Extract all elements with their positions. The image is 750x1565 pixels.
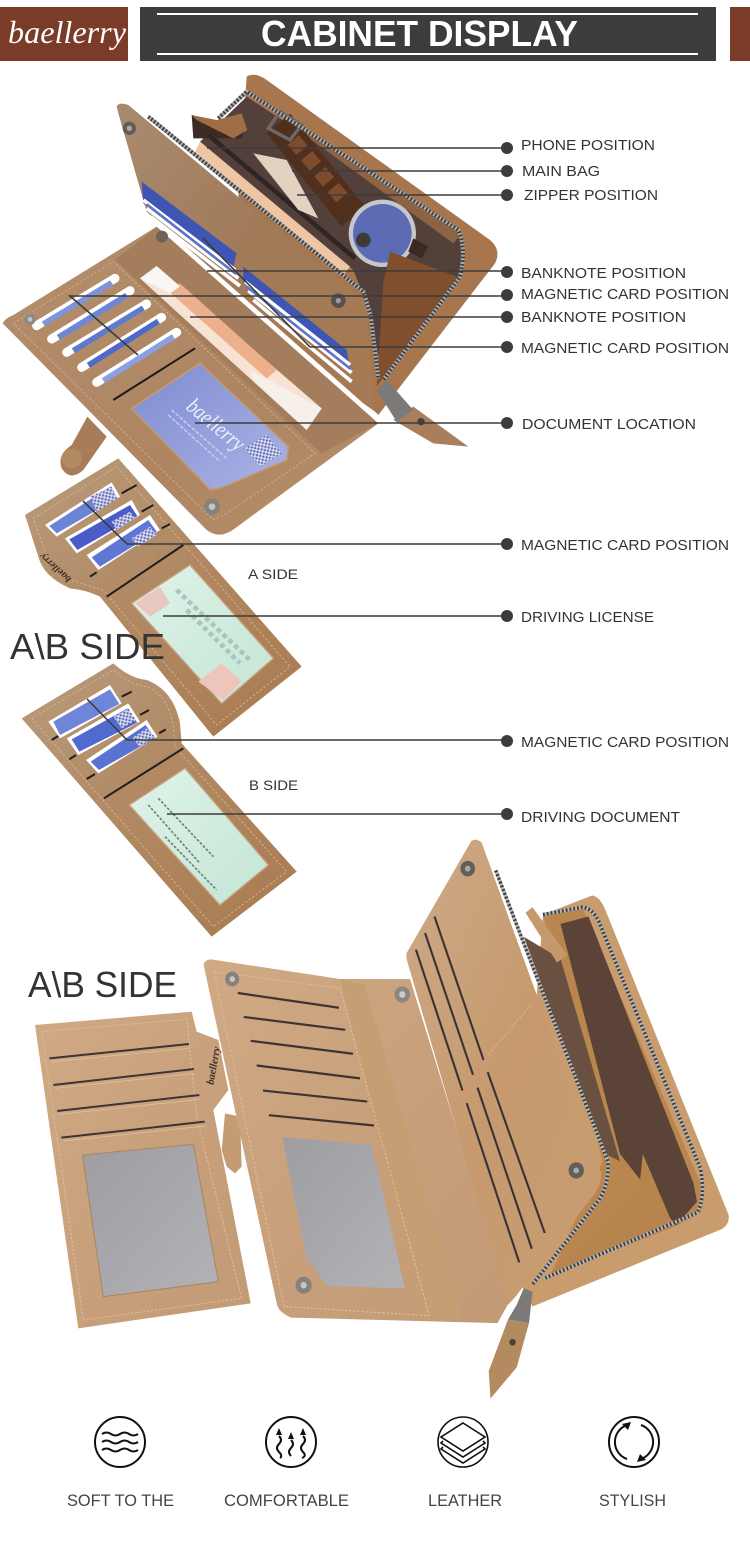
card holder B side <box>22 663 297 937</box>
A side label: A SIDE <box>248 566 298 582</box>
wallet front pocket <box>377 252 457 387</box>
callout: phone position <box>207 137 655 154</box>
callout: second banknote position <box>190 309 686 326</box>
wallet, outside view open <box>204 840 729 1399</box>
card holder A side <box>25 458 302 737</box>
section heading: A\B side, back view: A\B SIDE <box>28 964 177 1005</box>
zipper pull tab <box>377 380 468 447</box>
flap zipper <box>496 870 608 1284</box>
icon: rotation arrows <box>609 1417 659 1467</box>
B side label: B SIDE <box>249 777 298 793</box>
callout: magnetic card position, flap: MAGNETIC CARD POSITION <box>521 340 729 357</box>
card holder, back view <box>35 1012 251 1328</box>
callout: magnetic card position, flap <box>203 238 729 357</box>
document window <box>132 363 288 489</box>
feature: leather: LEATHER <box>428 1491 502 1510</box>
brand logo: baellerry <box>8 14 127 50</box>
lower card panel <box>3 227 378 535</box>
lower card panel: baellerry <box>182 393 251 457</box>
icon: layers <box>438 1417 488 1467</box>
feature: soft to the touch <box>67 1417 174 1510</box>
zippers <box>148 92 463 380</box>
callout: phone position: PHONE POSITION <box>521 137 655 154</box>
outer zipper <box>543 907 702 1279</box>
strap with snap <box>60 417 107 475</box>
feature: comfortable: COMFORTABLE <box>224 1491 349 1510</box>
feature row <box>67 1417 666 1510</box>
title <box>140 7 716 61</box>
callout: main bag: MAIN BAG <box>522 163 600 180</box>
callout: B side magnetic card position: MAGNETIC CARD POSITION <box>521 734 729 751</box>
inside panel <box>204 959 510 1323</box>
callout: driving license <box>163 609 654 626</box>
brand logo <box>0 7 128 61</box>
feature: soft to the touch: SOFT TO THE <box>67 1491 174 1510</box>
callout: main bag <box>292 163 600 180</box>
leader lines with callouts <box>70 137 729 826</box>
callout: A side magnetic card position: MAGNETIC CARD POSITION <box>521 537 729 554</box>
callout: A side magnetic card position <box>83 501 729 554</box>
callout: B side magnetic card position <box>87 699 729 751</box>
callout: document location <box>195 416 696 433</box>
callout: banknote position <box>207 265 686 282</box>
callout: driving document <box>167 808 680 826</box>
outer flap <box>406 840 601 1305</box>
brand mark: baellerry <box>205 1046 223 1086</box>
banknotes <box>140 266 322 430</box>
callout: driving document: DRIVING DOCUMENT <box>521 809 680 826</box>
header bar <box>0 7 750 61</box>
callout: driving license: DRIVING LICENSE <box>521 609 654 626</box>
callout: zipper position <box>297 187 658 204</box>
callout: banknote position: BANKNOTE POSITION <box>521 265 686 282</box>
callout: document location: DOCUMENT LOCATION <box>522 416 696 433</box>
callout: second banknote position: BANKNOTE POSITION <box>521 309 686 326</box>
upside-down brand mark: baellerry <box>37 550 74 584</box>
feature: stylish <box>599 1417 666 1510</box>
callout: magnetic card position, card slots: MAGNETIC CARD POSITION <box>521 286 729 303</box>
wallet: open with watch and phone <box>3 75 497 535</box>
callout: magnetic card position, card slots <box>70 286 729 355</box>
icon: rising heat arrows <box>266 1417 316 1467</box>
title: CABINET DISPLAY <box>261 13 578 54</box>
inner pocket <box>546 1154 673 1277</box>
feature: comfortable <box>224 1417 349 1510</box>
section heading: A\B side: A\B SIDE <box>10 626 165 667</box>
top flap <box>117 104 375 412</box>
feature: leather <box>428 1417 502 1510</box>
feature: stylish: STYLISH <box>599 1491 666 1510</box>
callout: zipper position: ZIPPER POSITION <box>524 187 658 204</box>
icon: waves <box>95 1417 145 1467</box>
zipper pull tab <box>489 1288 532 1399</box>
